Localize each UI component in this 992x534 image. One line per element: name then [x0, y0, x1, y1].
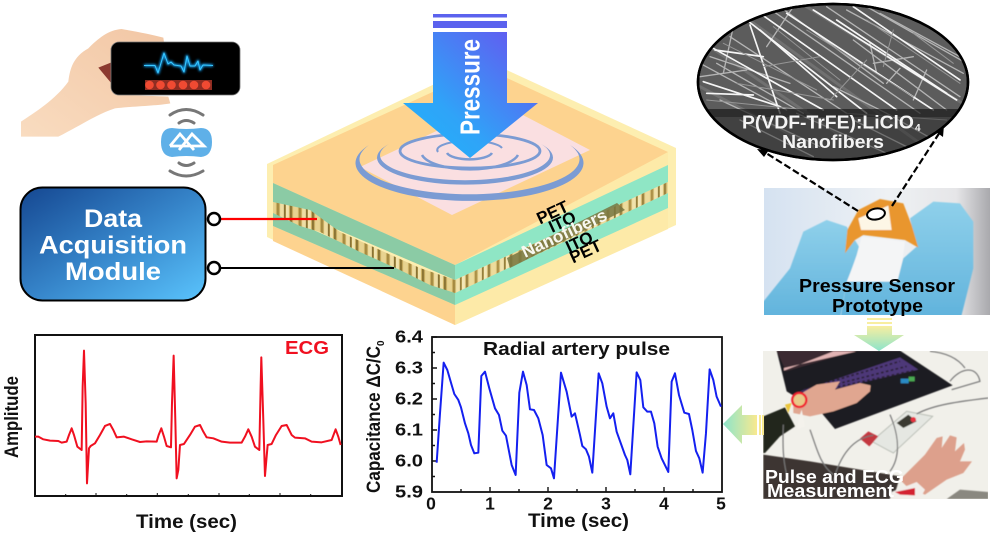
lower hand: [900, 435, 972, 495]
arrow: dashed zoom line right: [892, 125, 944, 206]
bluetooth glyph: [170, 134, 204, 150]
laptop screen: [777, 351, 834, 372]
wire: black lead: [208, 262, 394, 274]
wrist electrode marker: [792, 393, 806, 407]
layer label: ITO bottom: ITO: [563, 228, 596, 257]
measurement caption: Measurement: [767, 481, 894, 501]
prototype caption: [799, 276, 955, 316]
SEM caption band: [708, 109, 958, 117]
y tick labels: 6.1: [395, 420, 423, 440]
y tick labels: 6.3: [395, 358, 423, 378]
phone control buttons: [145, 80, 212, 90]
y tick labels: [395, 326, 423, 502]
sensor film: [845, 199, 918, 253]
chart: radial artery pulse: [364, 326, 726, 532]
module label: Acquisition: [39, 232, 187, 260]
SEM caption: 4: [915, 123, 921, 134]
breadboard: [872, 411, 933, 453]
red sensor board: [860, 431, 878, 446]
measurement caption: Pulse and ECG: [765, 467, 904, 487]
icon: hand: [21, 29, 170, 137]
x tick labels: 0: [426, 494, 436, 514]
floor right: [947, 490, 988, 499]
x tick labels: [426, 494, 726, 514]
prototype caption: Pressure Sensor: [799, 276, 955, 296]
arrow: pressure: [403, 14, 538, 158]
y tick labels: 5.9: [395, 482, 423, 502]
left upper teal layer: [273, 183, 455, 280]
x axis title: Time (sec): [136, 512, 237, 533]
icon: smartphone: [111, 42, 240, 95]
glove left: [764, 220, 860, 315]
pulse trace: [437, 363, 721, 478]
laptop keyboard: [800, 357, 918, 393]
sleeve: [763, 407, 795, 453]
module label: Data: [84, 205, 143, 233]
bluetooth badge: [161, 128, 212, 157]
layer label: PET bottom: PET: [567, 236, 605, 267]
wire: red lead: [208, 213, 317, 225]
ECG clip: [785, 403, 792, 413]
glove right: [840, 202, 973, 322]
measurement caption: [765, 467, 904, 501]
left face lower orange: [273, 226, 455, 325]
SEM caption: Nanofibers: [782, 132, 884, 152]
module label: [39, 205, 187, 286]
SEM fiber texture: [700, 6, 964, 158]
wireless arcs: [170, 110, 203, 176]
panel: pulse and ECG measurement photo: [763, 351, 988, 501]
prototype caption: Prototype: [832, 296, 923, 316]
pulse axis ticks: [432, 337, 693, 492]
ripple rings: [356, 134, 584, 201]
sensor zoom marker: [866, 207, 886, 221]
cables: [783, 351, 988, 481]
pale outer shell: [267, 60, 676, 325]
ECG trace: [35, 351, 341, 483]
left nanofiber layer: [273, 202, 455, 293]
wrist electrode band: [890, 482, 925, 499]
y tick labels: 6.0: [395, 450, 423, 470]
panel: SEM nanofibers lens: [690, 4, 980, 164]
x tick labels: 3: [601, 494, 611, 514]
ECG label: ECG: [285, 338, 329, 358]
ECG axis ticks: [66, 493, 311, 496]
arrow: dashed zoom line left: [757, 149, 858, 211]
top face: [273, 68, 668, 265]
right lower teal layer: [455, 193, 668, 305]
x tick labels: 1: [485, 494, 495, 514]
y axis title: Capacitance ΔC/C: [364, 346, 385, 493]
arrow: measurement to pulse chart: [723, 405, 764, 444]
layer label: PET top: PET: [534, 197, 572, 228]
layer label: nanofibers: Nanofibers: [519, 206, 610, 262]
SEM caption: [742, 112, 921, 152]
panel: data acquisition module: [20, 188, 206, 300]
hand shadow by the phone: [98, 62, 113, 86]
phone heartbeat trace: [144, 53, 213, 73]
nanofiber label band: [507, 203, 625, 268]
pressure label: Pressure: [454, 39, 486, 135]
right upper teal layer: [455, 165, 668, 280]
x tick labels: 4: [659, 494, 669, 514]
x tick labels: 5: [716, 494, 726, 514]
phone held in hand: [21, 29, 240, 137]
pulse chart title: Radial artery pulse: [483, 339, 670, 359]
laptop: [777, 351, 953, 429]
panel: pressure sensor prototype photo: [760, 188, 990, 322]
dark floor: [763, 455, 900, 499]
x axis title: Time (sec): [528, 511, 629, 532]
arrow top bars: [433, 14, 507, 18]
y tick labels: 6.4: [395, 326, 423, 346]
pressure sensor layer stack: [267, 60, 676, 325]
y axis title: Amplitude: [2, 376, 23, 458]
right side pale layer: [455, 152, 668, 325]
arrow: prototype to measurement: [854, 318, 904, 351]
SEM caption: P(VDF-TrFE):LiClO: [742, 112, 914, 132]
x tick labels: 2: [543, 494, 553, 514]
icon: bluetooth wireless link: [161, 110, 212, 176]
y axis title subscript: 0: [376, 340, 387, 346]
chart: ECG: [2, 335, 342, 533]
wrist band: [800, 410, 804, 416]
pressure contact patch: [360, 102, 590, 215]
upper hand: [793, 381, 871, 416]
microcontroller: [897, 415, 917, 428]
module label: Module: [65, 258, 161, 286]
layer label: ITO top: ITO: [546, 208, 579, 237]
right nanofiber layer: [455, 182, 668, 293]
gap between the fingers: [847, 237, 905, 282]
left lower teal layer: [273, 212, 455, 305]
y tick labels: 6.2: [395, 388, 423, 408]
